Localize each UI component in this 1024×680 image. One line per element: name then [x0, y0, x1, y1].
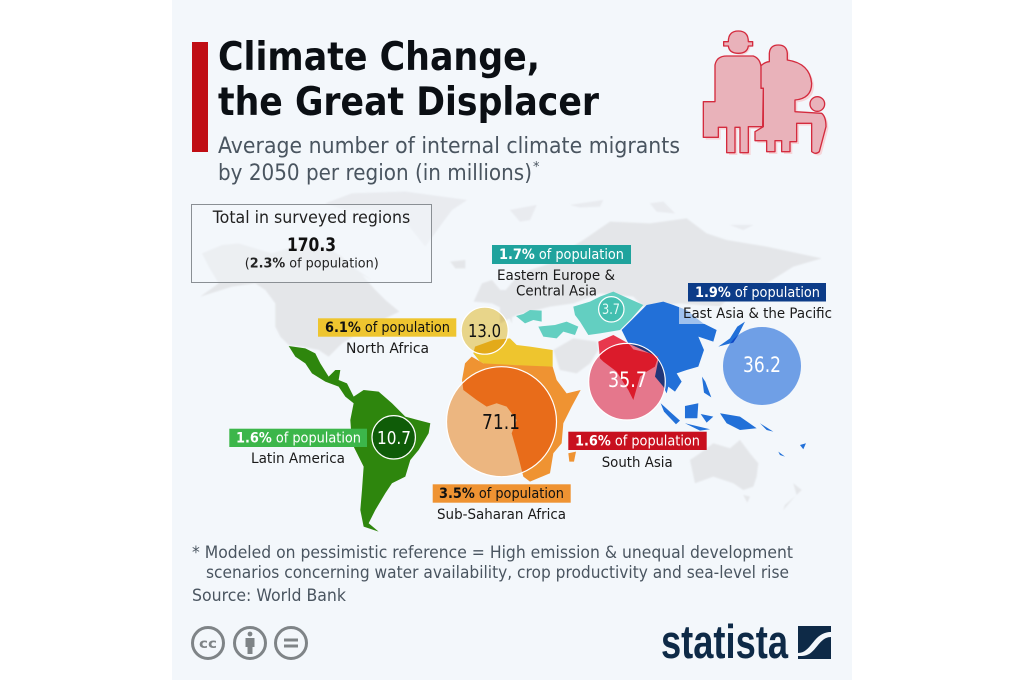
subtitle: Average number of internal climate migrants	[218, 133, 680, 159]
bubble values	[377, 302, 781, 449]
title: the Great Displacer	[218, 80, 600, 125]
map region: Latin America	[289, 346, 430, 532]
bubble: East Asia and the Pacific	[723, 327, 801, 405]
title	[218, 35, 600, 125]
total callout: (2.3% of population)	[245, 256, 379, 272]
footnote and source	[192, 543, 793, 605]
icon: family of migrants	[703, 31, 828, 156]
footnote and source: scenarios concerning water availability, crop productivity and sea-level rise	[206, 563, 789, 582]
total callout: 170.3	[287, 234, 336, 256]
subtitle: by 2050 per region (in millions)	[218, 160, 532, 186]
label: Eastern Europe and Central Asia: 1.7% of population	[499, 247, 624, 263]
bubble outlines	[372, 297, 665, 477]
label: South Asia: South Asia	[602, 455, 673, 471]
map region: East Asia and the Pacific	[622, 302, 806, 457]
bubble: South Asia	[589, 343, 665, 420]
label: North Africa	[318, 318, 456, 357]
label: Eastern Europe and Central Asia: Eastern Europe &	[497, 268, 615, 284]
icon: creative commons licence	[192, 628, 306, 658]
label: East Asia and the Pacific	[679, 283, 832, 324]
bubble values: 36.2	[743, 353, 781, 377]
label: Sub-Saharan Africa: 3.5% of population	[439, 486, 564, 502]
label: Latin America: 1.6% of population	[236, 430, 361, 446]
bubble: Eastern Europe and Central Asia	[599, 297, 624, 322]
map region: Eastern Europe and Central Asia	[516, 292, 643, 338]
bubble values: 10.7	[377, 429, 411, 449]
bubble: North Africa	[461, 307, 508, 354]
label: East Asia and the Pacific: East Asia & the Pacific	[683, 306, 832, 322]
label: Eastern Europe and Central Asia: Central Asia	[516, 284, 597, 300]
label: Latin America: Latin America	[251, 451, 345, 467]
label: North Africa: 6.1% of population	[325, 320, 450, 336]
map region: Africa	[462, 338, 581, 482]
bubble: Latin America	[372, 416, 415, 459]
title: Climate Change,	[218, 35, 540, 80]
subtitle: *	[533, 160, 540, 175]
bubble values: 3.7	[602, 302, 620, 318]
bubble values: 71.1	[482, 410, 520, 434]
logo: statista: statista	[661, 615, 789, 668]
total callout	[192, 204, 432, 282]
bubble values: 13.0	[468, 322, 501, 342]
label: Latin America	[229, 429, 367, 467]
icon: creative commons licence: cc	[199, 637, 217, 652]
label: Sub-Saharan Africa	[433, 484, 571, 523]
total callout: Total in surveyed regions	[212, 208, 410, 228]
label: Sub-Saharan Africa: Sub-Saharan Africa	[437, 507, 566, 523]
label: East Asia and the Pacific: 1.9% of population	[695, 285, 820, 301]
subtitle	[218, 133, 680, 186]
label: Eastern Europe and Central Asia	[492, 245, 631, 300]
label: North Africa: North Africa	[346, 341, 429, 357]
map region: South Asia	[598, 335, 658, 400]
title accent bar	[192, 42, 208, 152]
footnote and source: Source: World Bank	[192, 586, 346, 605]
footnote and source: * Modeled on pessimistic reference = High emission & unequal development	[192, 543, 793, 562]
world map background	[200, 192, 822, 510]
label: South Asia: 1.6% of population	[575, 434, 700, 450]
label: South Asia	[568, 432, 707, 471]
bubble: Sub-Saharan Africa	[446, 367, 556, 477]
bubble values: 35.7	[608, 368, 647, 392]
